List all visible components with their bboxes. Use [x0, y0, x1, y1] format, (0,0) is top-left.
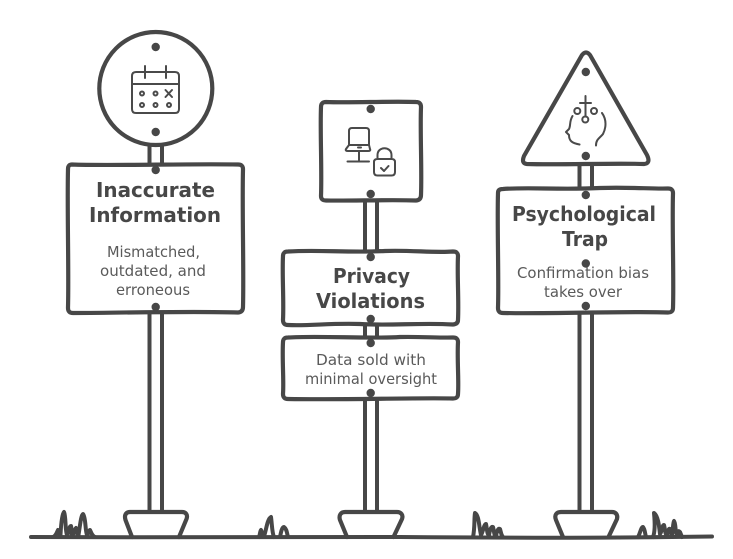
post [580, 158, 592, 512]
sign post: Psychological Trap [498, 52, 673, 537]
post base [555, 512, 617, 537]
sign post: Privacy Violations [283, 102, 458, 537]
body text: Mismatched, [107, 243, 200, 261]
bolts [152, 43, 160, 311]
grass: right centre [473, 513, 503, 537]
heading: Information [89, 203, 221, 227]
grass: left centre [259, 517, 288, 537]
sign post: Inaccurate Information [68, 32, 243, 537]
grass: far right [638, 513, 682, 537]
icon: laptop and padlock [346, 128, 395, 176]
bolts [366, 105, 375, 397]
post [150, 140, 162, 512]
body text: Data sold with [316, 351, 426, 369]
heading: Inaccurate [96, 178, 215, 202]
heading: Psychological [512, 202, 656, 226]
bolts [582, 68, 590, 310]
body text: takes over [544, 283, 623, 301]
heading: Privacy [333, 264, 410, 288]
body text: minimal oversight [305, 370, 437, 388]
panel: inaccurate information [68, 164, 243, 313]
icon: calendar [132, 66, 179, 113]
square icon sign [321, 102, 421, 201]
triangle icon sign [523, 52, 648, 164]
post base [340, 512, 402, 537]
body text: outdated, and [100, 262, 206, 280]
panel: psychological trap [498, 188, 673, 313]
icon: head with scales [566, 96, 606, 146]
heading: Violations [316, 289, 425, 313]
panel: privacy violations [283, 251, 458, 325]
post [365, 195, 377, 512]
panel: data sold [283, 337, 458, 399]
grass: far left [53, 512, 95, 537]
round icon sign [99, 32, 212, 145]
body text: erroneous [116, 281, 190, 299]
heading: Trap [562, 227, 608, 251]
ground line [31, 536, 712, 538]
grass tufts [53, 512, 682, 537]
body text: Confirmation bias [517, 264, 649, 282]
post base [125, 512, 187, 537]
